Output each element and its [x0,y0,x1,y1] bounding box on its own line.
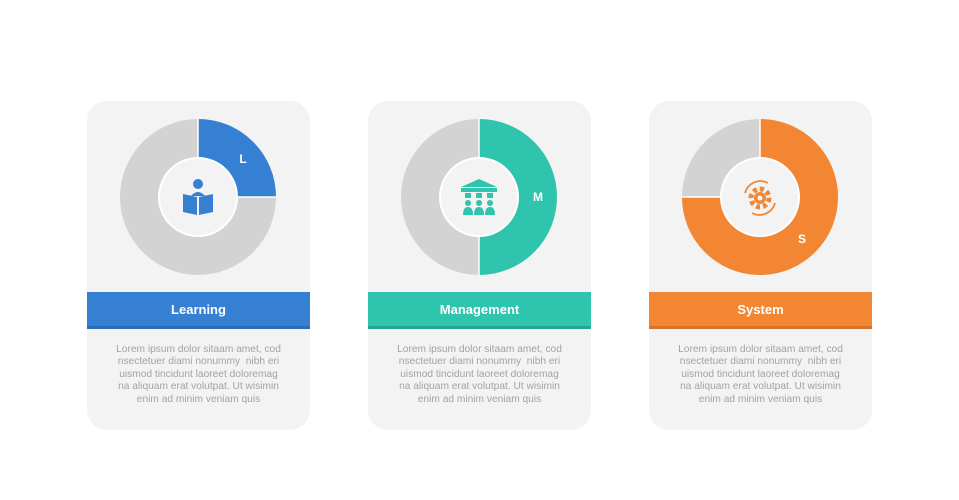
text block: Lorem ipsum dolor sitaam amet, cod [116,344,281,355]
icon: reader with book [183,179,213,215]
text block: uismod tincidunt laoreet doloremag [400,369,559,380]
text block: nsectetuer diami nonummy nibh eri [118,356,279,367]
banner: System [649,292,872,329]
banner: Learning [87,292,310,329]
icon: gear with arrows [745,181,775,215]
text block: nsectetuer diami nonummy nibh eri [680,356,841,367]
text block [678,344,843,405]
donut chart: Management [401,119,557,275]
text block: enim ad minim veniam quis [699,394,822,405]
donut chart: Learning: L [239,152,247,166]
banner: System: System [737,302,784,317]
banner: Management [368,292,591,329]
card: Management [368,101,591,430]
text block: Lorem ipsum dolor sitaam amet, cod [397,344,562,355]
card: Learning [87,101,310,430]
card: System [649,101,872,430]
banner: Management: Management [440,302,519,317]
text block: enim ad minim veniam quis [137,394,260,405]
banner: Learning: Learning [171,302,226,317]
donut chart: Management: M [533,190,543,204]
text block: Lorem ipsum dolor sitaam amet, cod [678,344,843,355]
donut chart: System [682,119,838,275]
text block [116,344,281,405]
donut chart: System: S [798,232,806,246]
donut chart: Learning [120,119,276,275]
text block: nsectetuer diami nonummy nibh eri [399,356,560,367]
text block [397,344,562,405]
text block: uismod tincidunt laoreet doloremag [119,369,278,380]
text block: uismod tincidunt laoreet doloremag [681,369,840,380]
text block: na aliquam erat volutpat. Ut wisimin [118,381,279,392]
text block: enim ad minim veniam quis [418,394,541,405]
text block: na aliquam erat volutpat. Ut wisimin [680,381,841,392]
text block: na aliquam erat volutpat. Ut wisimin [399,381,560,392]
icon: institution with people [461,179,497,215]
